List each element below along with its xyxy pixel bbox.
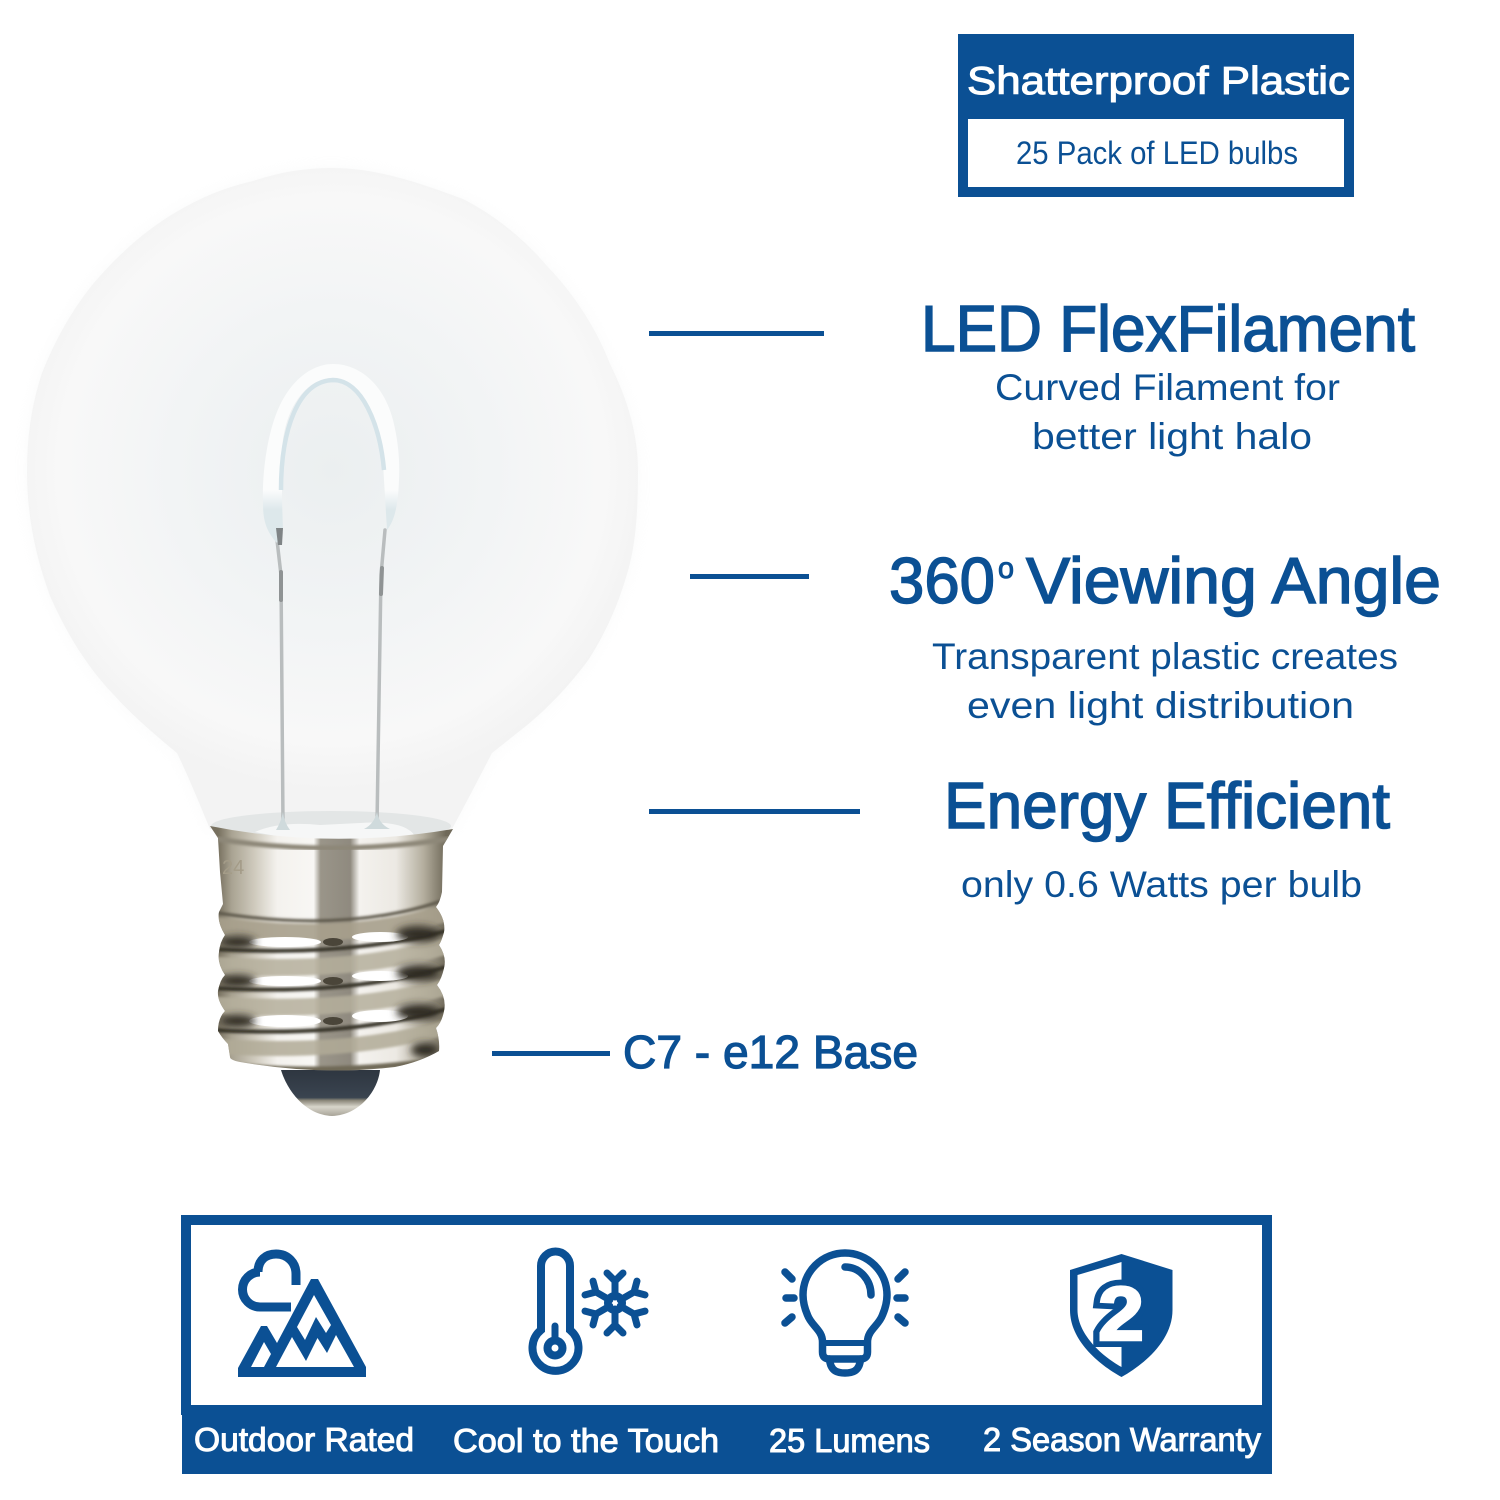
feature: LED FlexFilament: [921, 292, 1415, 457]
icon: two season warranty shield: 2: [1098, 1272, 1144, 1357]
support wires: [276, 530, 390, 830]
description line 1: Curved Filament for: [995, 367, 1340, 408]
feature: 360 Viewing Angle: [889, 544, 1441, 726]
degree mark: o: [998, 552, 1014, 585]
icon: thermometer and snowflake: [533, 1252, 645, 1371]
leader line: energy: [649, 809, 860, 814]
metal screw base: [210, 820, 455, 1116]
photo: LED globe bulb: [27, 168, 638, 1116]
caption: Outdoor Rated: Outdoor Rated: [194, 1421, 414, 1458]
caption: 25 Lumens: 25 Lumens: [769, 1422, 930, 1459]
leader line: filament: [649, 331, 824, 336]
icon: two season warranty shield: 2: [1098, 1272, 1144, 1357]
heading: Energy Efficient: [944, 769, 1390, 842]
heading: LED FlexFilament: [921, 292, 1415, 365]
label: C7 - e12 Base: C7 - e12 Base: [623, 1026, 918, 1078]
base imprint: 24: [222, 857, 244, 879]
heading text: Viewing Angle: [1026, 544, 1441, 617]
screw tip contact: [281, 1070, 380, 1116]
glass stem disc: [211, 811, 451, 841]
box heading: Shatterproof Plastic: [967, 60, 1350, 103]
callout box: Shatterproof Plastic: [958, 34, 1354, 197]
feature: Energy Efficient: [944, 769, 1390, 905]
heading number: 360: [889, 544, 995, 617]
leader line: viewing angle: [690, 574, 809, 579]
caption: 2 Season Warranty: 2 Season Warranty: [983, 1421, 1261, 1458]
bulb glass globe: [27, 168, 638, 829]
description line 2: better light halo: [1032, 416, 1312, 457]
threaded shell: [210, 820, 455, 1080]
description line 2: even light distribution: [967, 685, 1354, 726]
icon: cloud and mountains: [238, 1254, 366, 1377]
feature strip panel: [181, 1215, 1272, 1474]
caption: Cool to the Touch: Cool to the Touch: [453, 1422, 719, 1459]
leader line: base: [492, 1051, 610, 1056]
curved LED filament: [263, 364, 399, 545]
icon: light bulb: [785, 1253, 905, 1373]
description line 1: Transparent plastic creates: [932, 636, 1398, 677]
box subheading: 25 Pack of LED bulbs: [1016, 135, 1298, 171]
icon: two season warranty shield: [1070, 1254, 1172, 1377]
description: only 0.6 Watts per bulb: [961, 864, 1362, 905]
